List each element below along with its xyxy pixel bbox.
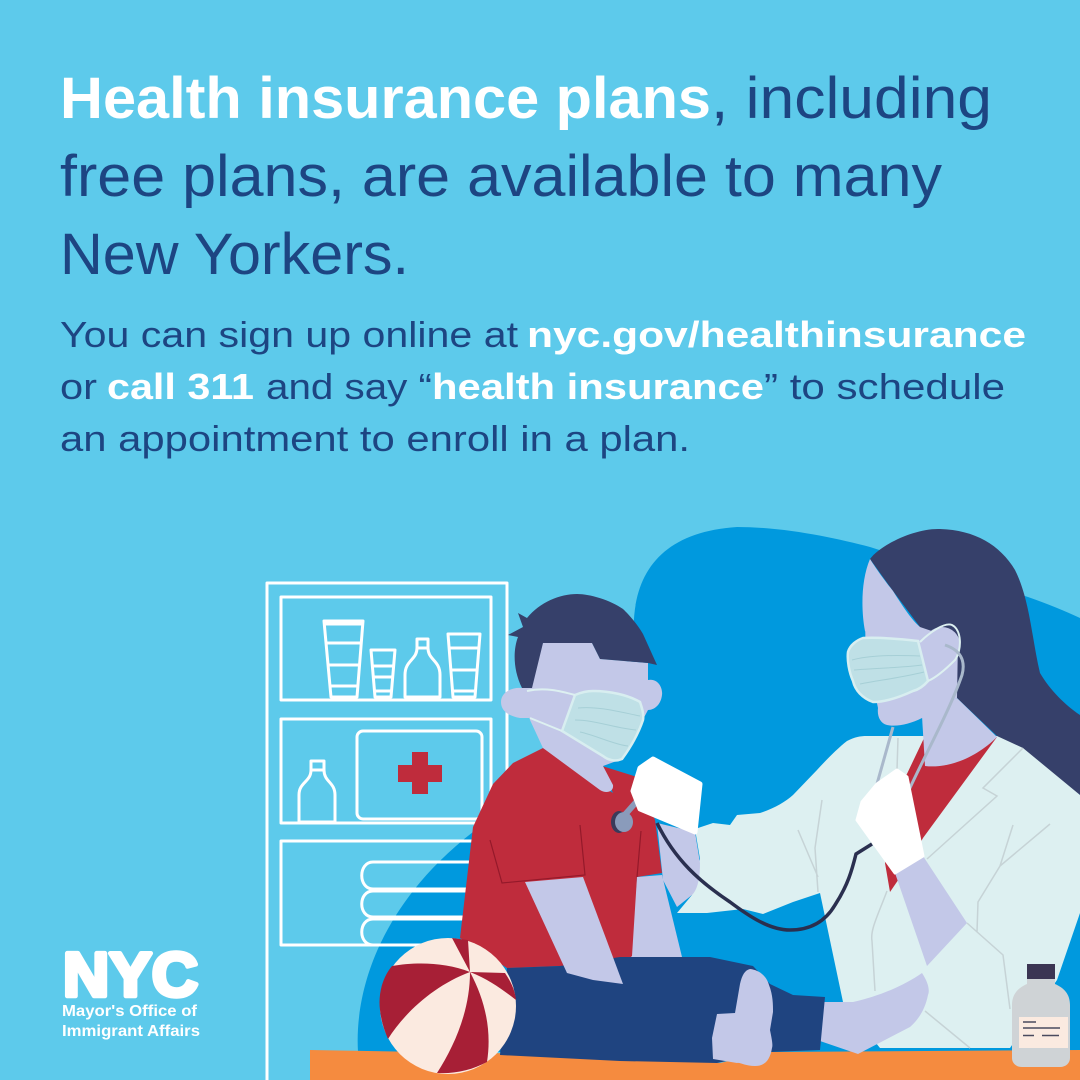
medicine cabinet — [267, 583, 507, 1080]
title — [60, 66, 992, 287]
boy foot — [712, 969, 773, 1066]
icon: red cross — [398, 752, 442, 794]
body text: an appointment to enroll in a plan. — [60, 418, 690, 459]
doctor mask — [848, 624, 960, 702]
doctor reaching arm — [657, 823, 700, 907]
logo: NYC Mayor's Office of Immigrant Affairs — [62, 941, 200, 1040]
body text: ” to schedule — [764, 366, 1005, 407]
doctor red shirt — [885, 736, 997, 892]
body text: health insurance — [432, 366, 764, 407]
middle shelf with first aid case — [281, 719, 491, 823]
boy right arm — [630, 875, 682, 957]
title: New Yorkers. — [60, 222, 409, 287]
logo: NYC Mayor's Office of Immigrant Affairs: Immigrant Affairs — [62, 1023, 200, 1040]
bottom shelf with towels — [281, 841, 481, 945]
doctor coat — [677, 736, 1080, 1048]
title: , including — [711, 66, 992, 131]
medicine bottle — [1012, 964, 1070, 1067]
coat fold lines — [798, 738, 1050, 1048]
doctor glove on child — [633, 759, 700, 832]
boy left arm — [525, 877, 623, 984]
body text: and say “ — [266, 366, 432, 407]
boy shorts — [500, 957, 825, 1063]
body text: call 311 — [107, 366, 254, 407]
body text: You can sign up online at — [60, 314, 518, 355]
boy mask — [527, 689, 643, 760]
doctor hair — [870, 529, 1080, 795]
boy hair — [508, 594, 657, 688]
beach ball — [380, 938, 516, 1074]
body text — [60, 314, 1026, 459]
stethoscope chest piece — [611, 800, 638, 833]
top shelf with bottles — [281, 597, 491, 700]
boy shirt — [460, 748, 662, 968]
cabinet frame — [267, 583, 507, 1080]
stethoscope tube — [657, 823, 872, 930]
title: Health insurance plans — [60, 66, 711, 131]
boy — [460, 594, 825, 1066]
doctor — [657, 529, 1080, 1054]
doctor glove on stethoscope — [857, 770, 923, 873]
doctor forearm — [895, 856, 967, 966]
boy ears — [501, 680, 662, 718]
logo: NYC Mayor's Office of Immigrant Affairs: NYC — [63, 941, 198, 1010]
sleeve lines — [490, 825, 641, 883]
stethoscope ear tubes — [875, 645, 963, 791]
table top — [310, 1050, 1080, 1080]
body text: or — [60, 366, 97, 407]
title: free plans, are available to many — [60, 144, 942, 209]
doctor face — [862, 559, 958, 726]
logo: NYC Mayor's Office of Immigrant Affairs: Mayor's Office of — [62, 1003, 198, 1020]
boy head — [522, 643, 648, 792]
doctor lower arm — [820, 973, 929, 1054]
body text: nyc.gov/healthinsurance — [527, 314, 1026, 355]
background blob — [358, 527, 1080, 1052]
doctor neck — [922, 698, 997, 766]
